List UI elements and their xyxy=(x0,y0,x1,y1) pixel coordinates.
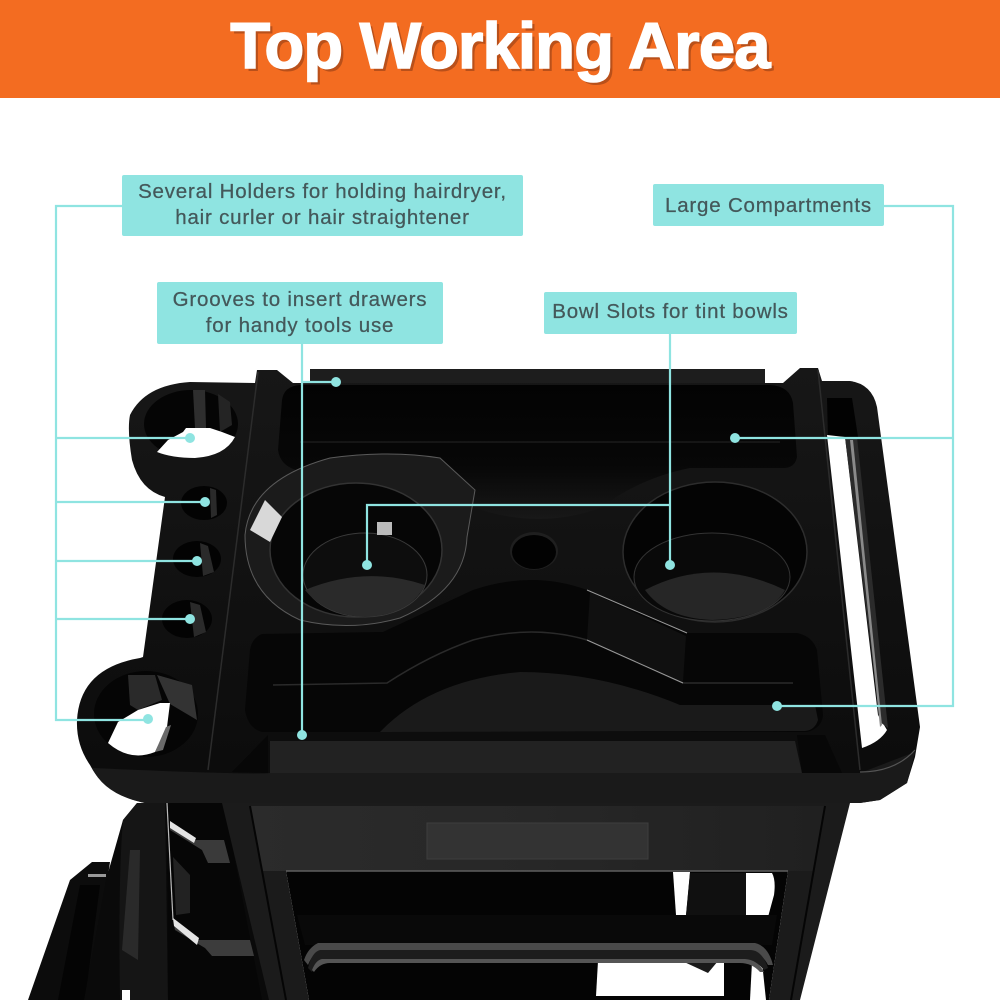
bottom groove xyxy=(270,741,802,773)
drawer rim xyxy=(304,943,773,965)
large holder top xyxy=(144,390,238,458)
holder holes xyxy=(94,390,238,757)
callout: bowl slots: Bowl Slots for tint bowls xyxy=(552,300,789,323)
callout lines xyxy=(56,206,953,735)
tray seams and compartments xyxy=(92,369,915,803)
bowl slot right xyxy=(623,482,807,622)
handle opening xyxy=(827,398,858,437)
callout: grooves: for handy tools use xyxy=(206,314,394,336)
callout: large compartments xyxy=(653,184,884,226)
frame with legs xyxy=(222,803,850,1000)
callout: large compartments: Large Compartments xyxy=(665,194,872,217)
callout: bowl slots xyxy=(544,292,797,334)
side post and drawers xyxy=(84,803,270,1000)
callout dots xyxy=(143,377,782,740)
callout: grooves xyxy=(157,282,443,344)
compartment floor sheen xyxy=(380,672,818,732)
callout: holders: Several Holders for holding hairdryer, xyxy=(138,180,507,203)
tint bowl xyxy=(245,454,475,626)
top large compartment xyxy=(278,385,797,519)
lip band xyxy=(92,752,915,803)
window behind frame xyxy=(286,871,788,1000)
header banner xyxy=(0,0,1000,98)
bottom large compartment xyxy=(245,580,823,732)
small holders xyxy=(181,486,227,520)
callout: holders xyxy=(122,175,523,236)
callout: holders: hair curler or hair straightener xyxy=(175,206,470,229)
label plate xyxy=(427,823,648,859)
upper drawer rim xyxy=(170,823,230,863)
lower drawer rim xyxy=(173,920,254,956)
tray body xyxy=(77,368,920,803)
callout: grooves: Grooves to insert drawers xyxy=(173,288,427,311)
center holder xyxy=(510,532,558,570)
title: Top Working Area xyxy=(230,9,770,82)
trolley lower body xyxy=(28,803,850,1000)
rear side tray xyxy=(28,862,110,1000)
large holder bottom xyxy=(94,671,198,757)
top groove xyxy=(310,369,765,383)
